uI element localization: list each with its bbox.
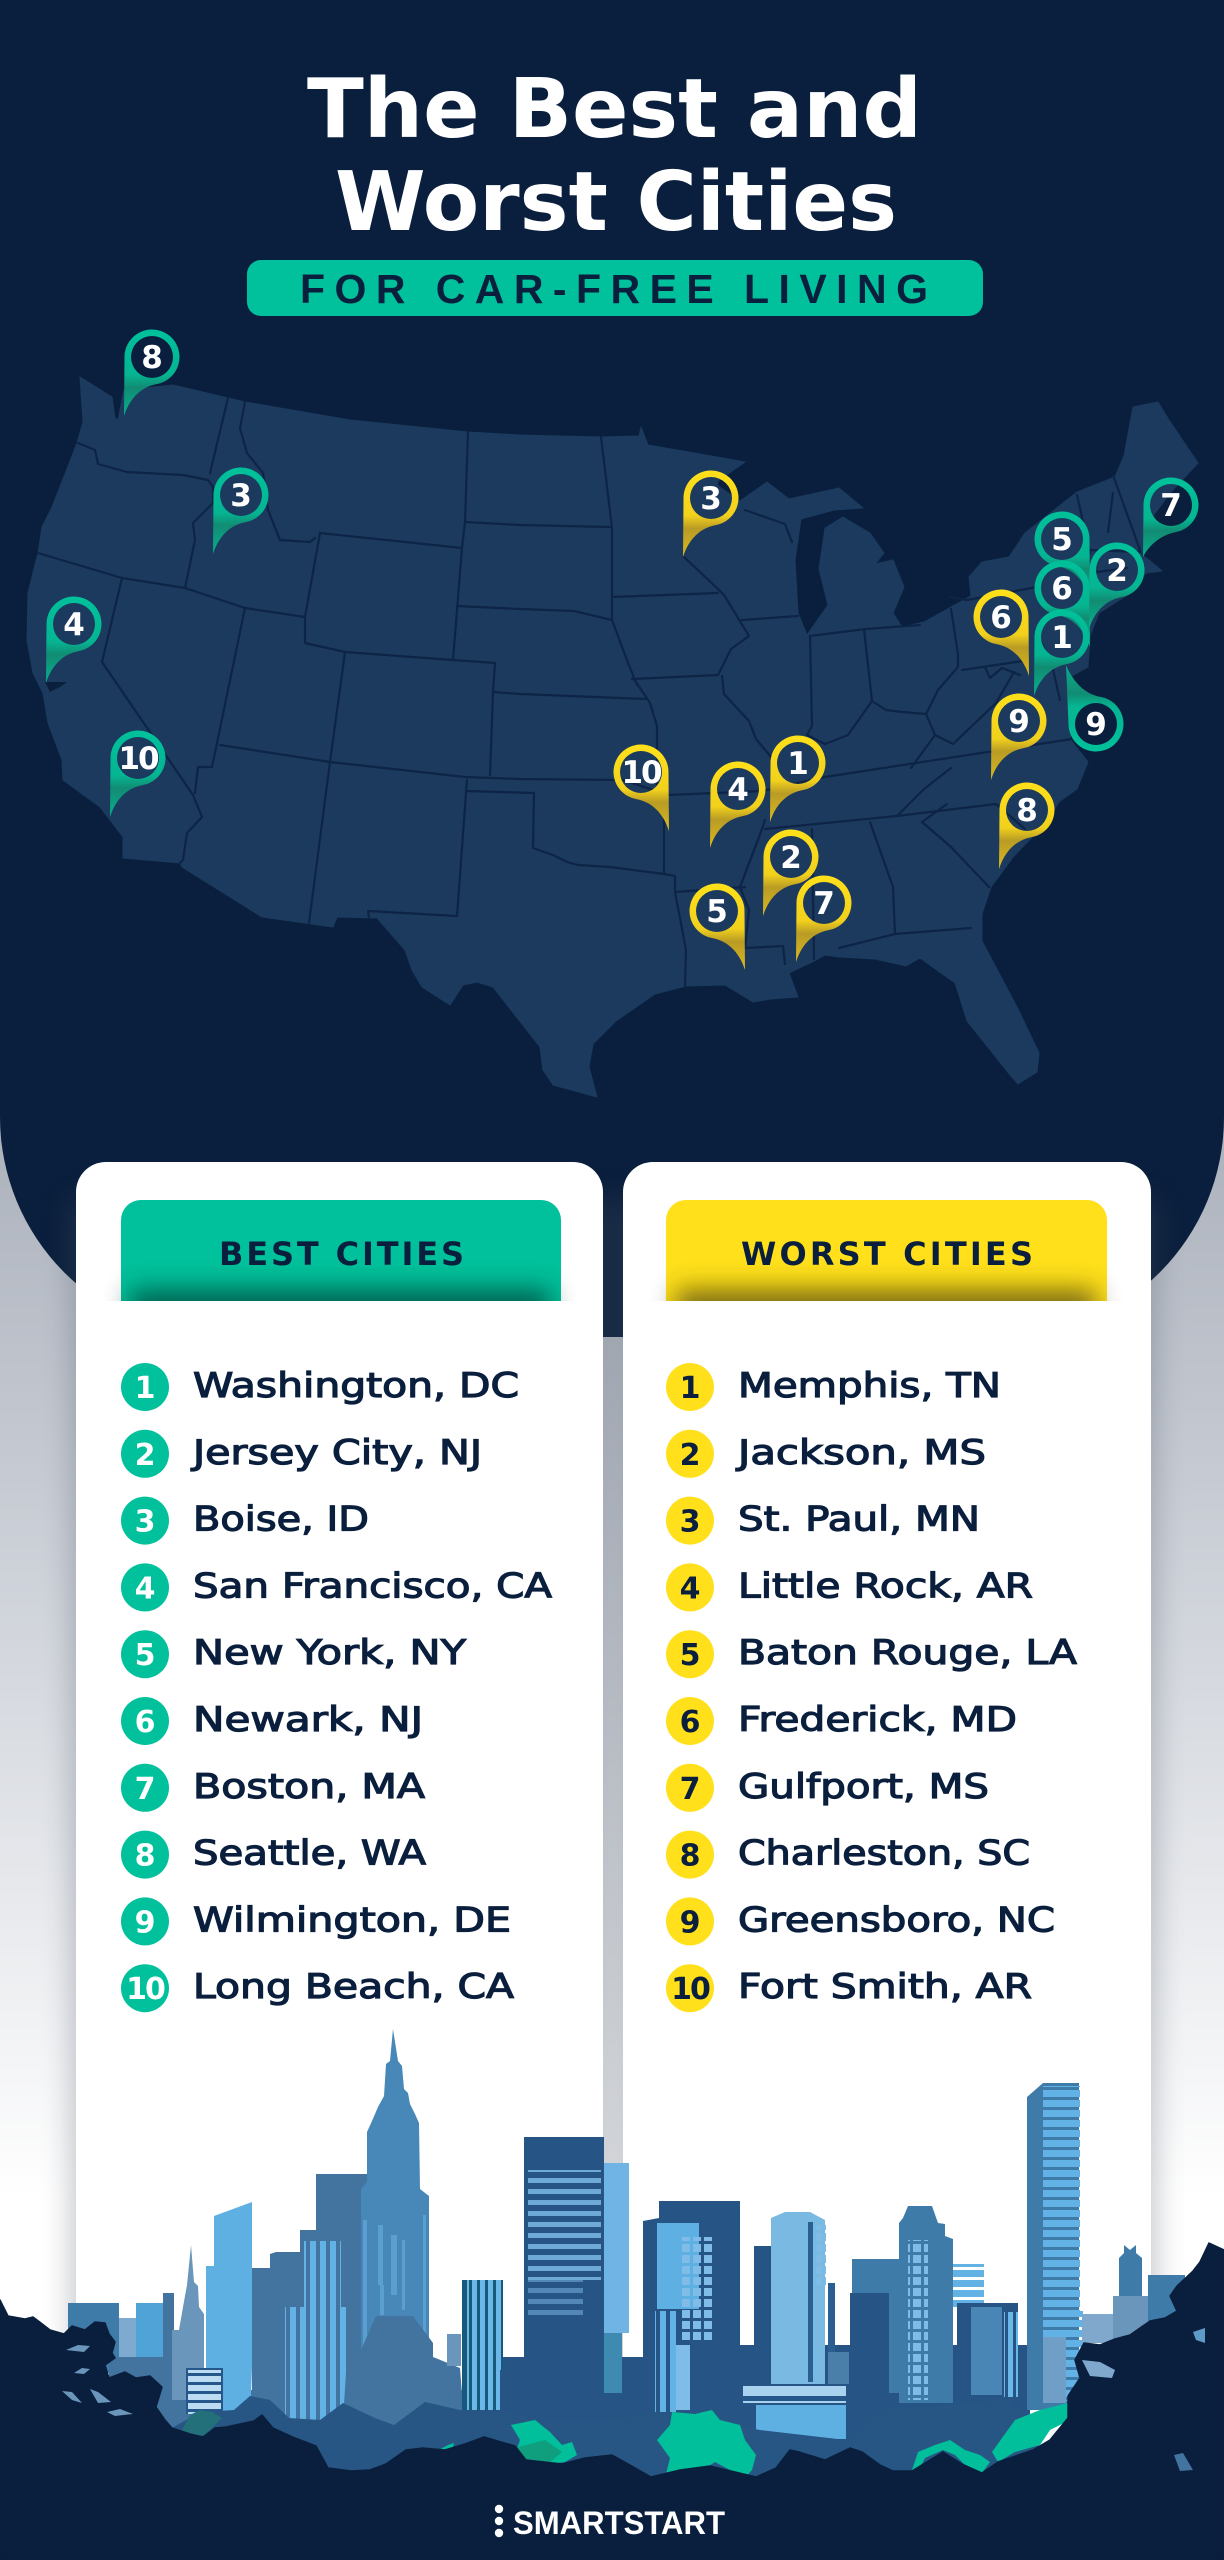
green shrubs xyxy=(181,2403,1070,2478)
rank 8: Charleston, SC xyxy=(738,1834,1030,1874)
rank 3 xyxy=(121,1497,369,1545)
pin: worst 8 Charleston xyxy=(999,782,1054,869)
pin: best 7 Boston: 7 xyxy=(1160,488,1182,524)
mid-rise tower group xyxy=(252,2174,367,2420)
rank 10: Fort Smith, AR xyxy=(738,1967,1032,2007)
pin: best 4 San Francisco: 4 xyxy=(63,607,85,643)
state borders xyxy=(38,398,1140,986)
city skyline illustration xyxy=(0,2029,1224,2560)
pin: worst 3 St. Paul: 3 xyxy=(700,481,722,517)
pin: worst 4 Little Rock: 4 xyxy=(727,772,749,808)
pin: best 1 Washington xyxy=(1034,609,1090,696)
tallest slim tower xyxy=(1027,2083,1083,2410)
rank 1 xyxy=(666,1363,1001,1411)
rank 7: 7 xyxy=(680,1772,700,1807)
rank 9: 9 xyxy=(680,1905,700,1940)
rank 5 xyxy=(666,1630,1077,1678)
heading tab: worst cities xyxy=(657,1200,1115,1301)
card background xyxy=(76,1162,603,2430)
rank 8: Seattle, WA xyxy=(193,1834,426,1874)
empire-style skyscraper xyxy=(343,2029,464,2420)
rank 10 xyxy=(666,1964,1032,2012)
logo dots icon xyxy=(495,2505,503,2537)
page background xyxy=(0,1100,1224,2200)
pin: best 7 Boston xyxy=(1143,477,1198,557)
pin: best 5 New York xyxy=(1034,511,1090,598)
rank 2: Jackson, MS xyxy=(736,1433,986,1473)
rank 4: San Francisco, CA xyxy=(193,1566,552,1606)
pin: worst 5 Baton Rouge: 5 xyxy=(706,894,728,930)
rank 6: Newark, NJ xyxy=(193,1700,423,1740)
rank 4 xyxy=(121,1563,552,1611)
rank 8: 8 xyxy=(680,1839,700,1874)
rank 9 xyxy=(666,1897,1055,1945)
pin: worst 7 Gulfport: 7 xyxy=(813,886,835,922)
rank 9: Greensboro, NC xyxy=(738,1900,1055,1940)
rank 1 xyxy=(121,1363,519,1411)
card shadows xyxy=(70,1200,1157,2420)
rank 6: 6 xyxy=(680,1705,700,1740)
rank 5 xyxy=(121,1630,466,1678)
rank 6 xyxy=(666,1697,1017,1745)
ranked list: worst cities xyxy=(666,1363,1077,2012)
rank 4: 4 xyxy=(680,1571,700,1606)
rank 3: 3 xyxy=(680,1505,700,1540)
pin: worst 1 Memphis xyxy=(770,735,826,822)
rank 1: 1 xyxy=(135,1371,155,1406)
rank 6: 6 xyxy=(135,1705,155,1740)
rank 1: Memphis, TN xyxy=(738,1366,1001,1406)
rank 2: 2 xyxy=(135,1438,155,1473)
panel: best cities xyxy=(76,1162,603,2430)
rank 7: 7 xyxy=(135,1772,155,1807)
heading tab: best cities xyxy=(111,1200,569,1301)
tall light tower xyxy=(604,2163,629,2393)
heading tab: best cities: BEST CITIES xyxy=(219,1235,464,1273)
rank 7: Boston, MA xyxy=(193,1767,425,1807)
rank 6 xyxy=(121,1697,423,1745)
pin: worst 4 Little Rock xyxy=(710,761,766,848)
rank 1: 1 xyxy=(680,1371,700,1406)
rounded glass tower and podium xyxy=(743,2212,849,2439)
san francisco bay xyxy=(45,682,67,692)
pin: best 6 Newark: 6 xyxy=(1051,571,1073,607)
rank 6: Frederick, MD xyxy=(738,1700,1017,1740)
rank 4: Little Rock, AR xyxy=(738,1566,1033,1606)
rank 10: 10 xyxy=(126,1972,165,2007)
rank 2: Jersey City, NJ xyxy=(191,1433,482,1473)
mid-ground hedge band xyxy=(100,2396,1040,2485)
ground behind buildings xyxy=(100,2345,1030,2490)
rank 2: 2 xyxy=(680,1438,700,1473)
panel: worst cities xyxy=(623,1162,1151,2430)
rank 10 xyxy=(121,1964,514,2012)
rank 9 xyxy=(121,1897,511,1945)
title: The Best and xyxy=(307,62,922,157)
pin: worst 6 Frederick: 6 xyxy=(990,600,1012,636)
ranked list: best cities xyxy=(121,1363,552,2012)
pin: best 10 Long Beach xyxy=(110,730,166,817)
rank 7 xyxy=(666,1764,989,1812)
pin: best 6 Newark xyxy=(1034,560,1090,647)
pin: best 3 Boise xyxy=(213,467,268,554)
rank 5: New York, NY xyxy=(193,1633,466,1673)
rank 8 xyxy=(666,1831,1030,1879)
pin: worst 1 Memphis: 1 xyxy=(787,746,809,782)
rank 3: St. Paul, MN xyxy=(738,1500,980,1540)
subtitle pill: FOR CAR-FREE LIVING xyxy=(300,266,928,312)
pin: best 5 New York: 5 xyxy=(1051,522,1073,558)
rank 7: Gulfport, MS xyxy=(738,1767,989,1807)
stepped tower cluster xyxy=(850,2206,1018,2413)
title xyxy=(307,62,922,250)
pin: worst 6 Frederick xyxy=(974,589,1029,676)
pin: best 1 Washington: 1 xyxy=(1051,620,1073,656)
rank 1: Washington, DC xyxy=(193,1366,519,1406)
pin: best 10 Long Beach: 10 xyxy=(118,741,159,777)
pin: best 8 Seattle: 8 xyxy=(141,340,163,376)
rank 10: 10 xyxy=(671,1972,710,2007)
blue-faced office tower xyxy=(625,2201,760,2420)
best and worst city map pins xyxy=(46,329,1198,970)
pin: worst 10 Fort Smith: 10 xyxy=(621,755,662,791)
map of the United States xyxy=(27,377,1198,1097)
pin: best 4 San Francisco xyxy=(46,596,102,683)
pin: best 9 Wilmington: 9 xyxy=(1085,707,1107,743)
pin: worst 5 Baton Rouge xyxy=(690,883,745,970)
rank 7 xyxy=(121,1764,425,1812)
rank 3: 3 xyxy=(135,1505,155,1540)
rank 2 xyxy=(121,1430,482,1478)
rank 5: 5 xyxy=(135,1638,155,1673)
striped tower xyxy=(462,2280,503,2410)
foreground trees xyxy=(0,2243,1224,2560)
pin: worst 9 Greensboro: 9 xyxy=(1008,704,1030,740)
smartstart logo xyxy=(495,2505,725,2541)
right low-rise buildings xyxy=(1082,2245,1185,2343)
pin: worst 10 Fort Smith xyxy=(614,744,669,831)
pin: worst 2 Jackson: 2 xyxy=(780,840,802,876)
rank 8: 8 xyxy=(135,1839,155,1874)
rank 5: 5 xyxy=(680,1638,700,1673)
pin: best 9 Wilmington xyxy=(1066,665,1124,752)
heading tab: worst cities: WORST CITIES xyxy=(741,1235,1033,1273)
pin: worst 2 Jackson xyxy=(763,829,818,916)
navy header panel xyxy=(0,0,1224,1337)
rank 3: Boise, ID xyxy=(193,1500,369,1540)
land outline xyxy=(27,377,1198,1097)
rank 2 xyxy=(666,1430,986,1478)
title: Worst Cities xyxy=(335,155,897,250)
rank 5: Baton Rouge, LA xyxy=(738,1633,1077,1673)
rank 3 xyxy=(666,1497,980,1545)
pin: worst 7 Gulfport xyxy=(796,875,852,962)
left low-rise buildings xyxy=(68,2202,252,2420)
pin: best 3 Boise: 3 xyxy=(230,478,252,514)
logo wordmark: SMARTSTART xyxy=(513,2505,725,2541)
rank 4 xyxy=(666,1563,1033,1611)
pin: best 2 Jersey City xyxy=(1089,542,1144,629)
leaf gaps xyxy=(62,2328,1205,2471)
dark window tower xyxy=(500,2137,620,2420)
pin: best 2 Jersey City: 2 xyxy=(1106,553,1128,589)
rank 10: Long Beach, CA xyxy=(193,1967,514,2007)
rank 8 xyxy=(121,1831,426,1879)
pin: best 8 Seattle xyxy=(124,329,180,416)
rank 9: 9 xyxy=(135,1905,155,1940)
pin: worst 8 Charleston: 8 xyxy=(1016,793,1038,829)
pin: worst 9 Greensboro xyxy=(991,693,1046,780)
pin: worst 3 St. Paul xyxy=(683,470,738,557)
rank 9: Wilmington, DE xyxy=(193,1900,511,1940)
rank 4: 4 xyxy=(135,1571,155,1606)
card background xyxy=(623,1162,1151,2430)
